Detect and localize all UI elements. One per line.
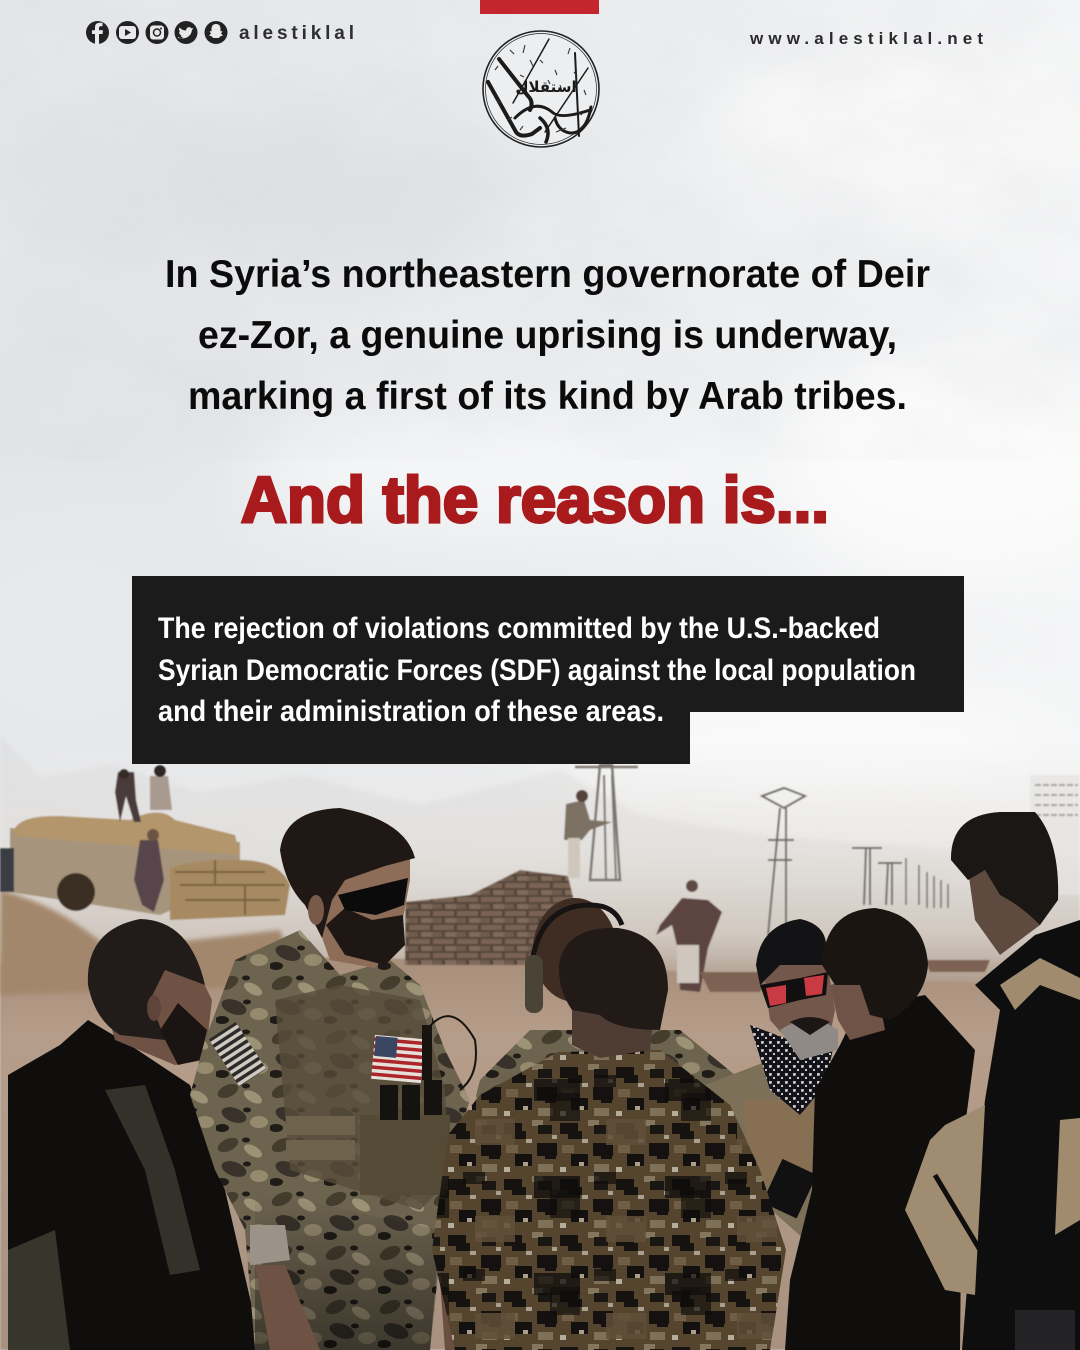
icon: snapchat (204, 21, 228, 44)
figures on the bunker (115, 765, 172, 912)
dark callout panel (132, 576, 964, 764)
faded newspaper text block (1030, 775, 1080, 895)
brick wall (405, 870, 590, 965)
person: US soldier with sunglasses (190, 808, 485, 1350)
running figure (656, 880, 722, 992)
icon: facebook (86, 21, 109, 44)
intro heading (165, 253, 930, 418)
person: back-view soldier in digital camo (432, 928, 786, 1350)
red headline: And the reason is... (241, 463, 829, 536)
head (305, 850, 410, 968)
person: man in black fleece (785, 908, 975, 1350)
person: right man with backpack (905, 812, 1080, 1350)
intro heading: marking a first of its kind by Arab tribes. (188, 375, 907, 418)
logo: circular calligraphic seal (483, 31, 599, 147)
photo: headset soldier behind (470, 898, 745, 1120)
transmission pylons (762, 788, 948, 935)
intro heading: ez-Zor, a genuine uprising is underway, (198, 314, 897, 357)
icon: youtube (116, 21, 139, 44)
intro heading: In Syria’s northeastern governorate of Deir (165, 253, 930, 296)
icon: twitter (174, 21, 198, 44)
person: man in black hoodie (8, 919, 262, 1350)
callout text (158, 612, 916, 728)
photo: desert background scene (0, 735, 1080, 1350)
website url: www.alestiklal.net (749, 29, 983, 48)
icon: instagram (146, 21, 168, 44)
bunker with sandbags (0, 812, 290, 920)
callout text: The rejection of violations committed by the U.S.-backed (158, 612, 880, 645)
flag patch: arm (209, 1022, 266, 1086)
backpack straps and bag (905, 958, 1080, 1295)
top red tab (480, 0, 599, 14)
person: soldier with cap and red glasses (705, 919, 840, 1240)
social icons (86, 21, 228, 44)
rubble bricks (700, 960, 990, 992)
logo: circular calligraphic seal: استقلال (515, 78, 577, 96)
flag patch: chest (371, 1035, 425, 1083)
callout text: Syrian Democratic Forces (SDF) against the local population (158, 654, 916, 687)
pylon and climbing figure (564, 765, 638, 880)
social handle: alestiklal (239, 23, 354, 44)
callout text: and their administration of these areas. (158, 695, 664, 728)
